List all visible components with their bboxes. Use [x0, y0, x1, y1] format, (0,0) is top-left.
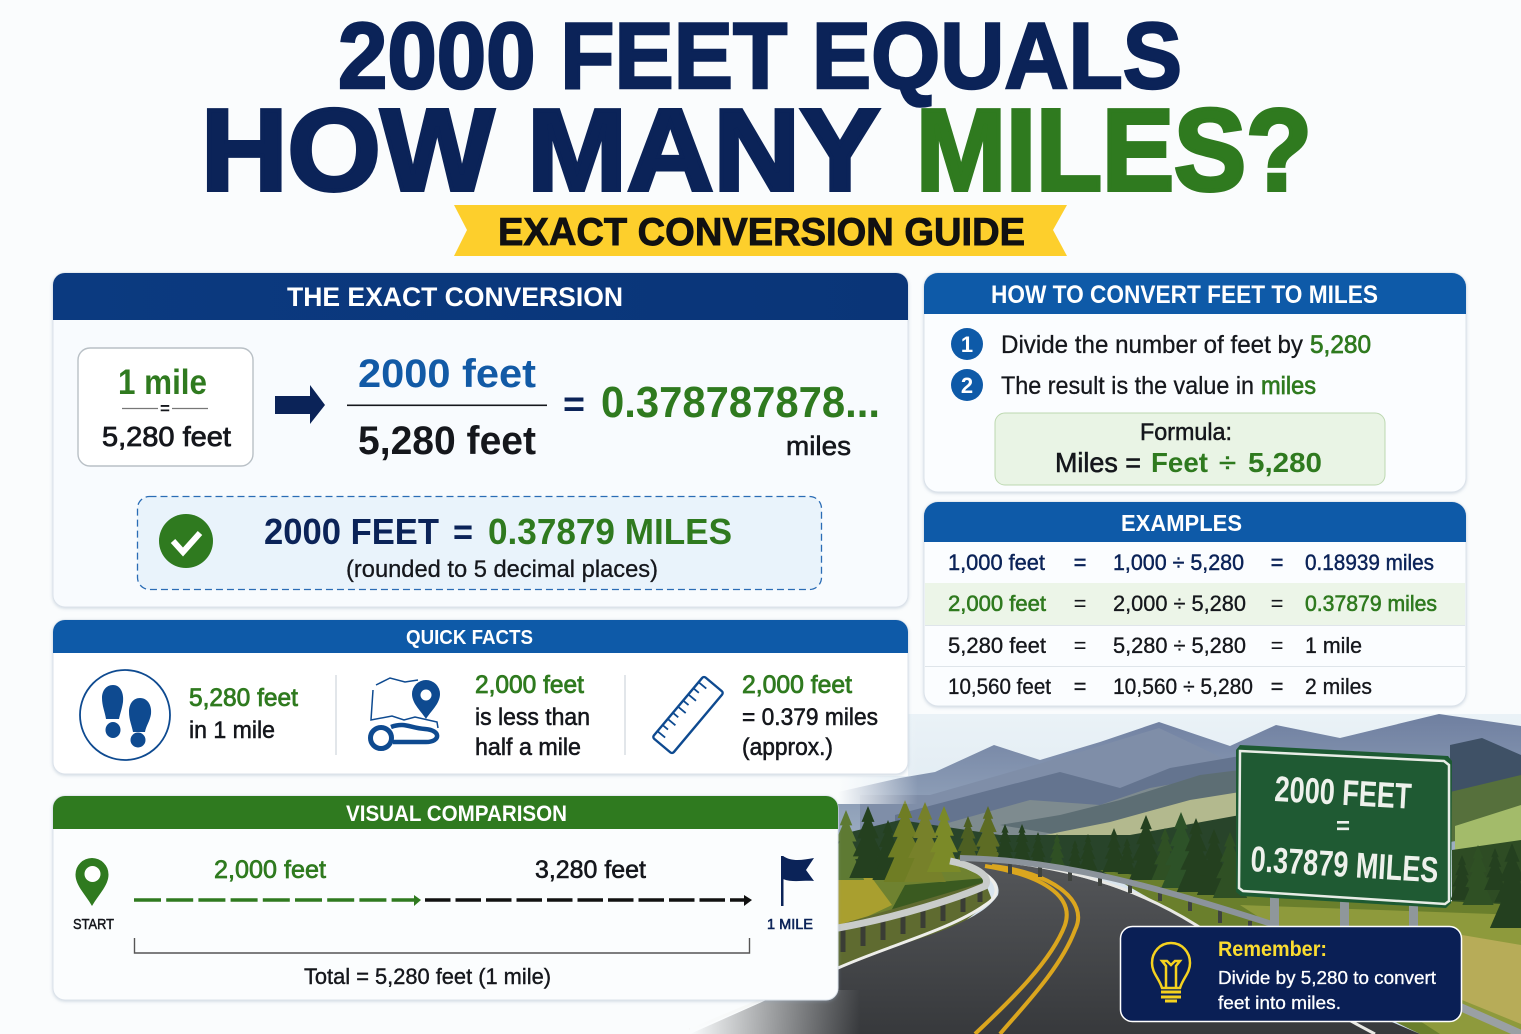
sign text: 2000 FEET	[1274, 768, 1413, 817]
icon: ruler	[652, 676, 724, 754]
panel: visual comparison	[53, 796, 838, 1000]
step 1	[951, 328, 1371, 360]
mountains right of sign	[1450, 738, 1521, 822]
header: the exact conversion	[53, 273, 908, 320]
row: 2,000 feet highlighted	[925, 583, 1465, 625]
formula box: Feet	[1151, 447, 1208, 478]
row: 1,000 feet	[948, 550, 1434, 575]
sign text: 0.37879 MILES	[1250, 838, 1440, 890]
left road edge line	[690, 868, 996, 1030]
row: 1,000 feet: 0.18939 miles	[1305, 550, 1434, 575]
panel: examples	[924, 502, 1466, 706]
box: 1 mile = 5,280 feet: 1 mile	[118, 363, 207, 402]
label: 2,000 feet: 2,000 feet	[214, 856, 326, 884]
row: 10,560 feet	[948, 674, 1372, 699]
row: 2,000 feet highlighted: =	[1271, 591, 1283, 616]
tree line mass	[838, 815, 1240, 900]
formula box: 5,280	[1248, 447, 1322, 478]
fact 1: in 1 mile	[189, 717, 275, 744]
row: 10,560 feet: =	[1271, 674, 1283, 699]
row: 1,000 feet: 1,000 ÷ 5,280	[1113, 550, 1244, 575]
fact 3: 2,000 feet	[742, 671, 852, 699]
trees	[828, 800, 1521, 928]
fact 3: (approx.)	[742, 734, 833, 761]
header: the exact conversion: THE EXACT CONVERSION	[287, 282, 623, 312]
row: 10,560 feet: =	[1074, 674, 1086, 699]
row: 2,000 feet highlighted: 2,000 feet	[948, 591, 1047, 616]
road and mountain landscape photo	[690, 714, 1521, 1034]
panel: quick facts	[53, 620, 908, 774]
row: 5,280 feet: =	[1074, 633, 1086, 658]
header: visual comparison	[53, 796, 838, 829]
fact 3	[742, 671, 878, 761]
header: examples	[924, 502, 1466, 542]
hillside grass	[1100, 870, 1521, 1034]
formula box: Miles =	[1055, 447, 1141, 478]
total bracket	[134, 938, 750, 953]
fraction	[347, 352, 547, 463]
right tree mass	[1452, 840, 1521, 930]
title line 2: MILES?	[916, 85, 1312, 215]
row: 1,000 feet: =	[1074, 550, 1086, 575]
left photo fade	[690, 990, 860, 1034]
header: visual comparison: VISUAL COMPARISON	[346, 801, 567, 826]
formula box: Formula:	[1140, 419, 1232, 446]
icon: map with pin	[370, 678, 440, 748]
arrow	[275, 385, 325, 424]
fraction: 2000 feet	[358, 352, 536, 396]
icon: check mark	[159, 514, 213, 568]
fact 1	[189, 684, 298, 744]
fact 2: half a mile	[475, 734, 581, 761]
formula box: ÷	[1219, 447, 1236, 478]
icon: footprints	[80, 670, 170, 760]
fact 1: 5,280 feet	[189, 684, 298, 712]
double yellow centre line	[975, 866, 1078, 1034]
right road edge line	[1000, 861, 1375, 1034]
row: 2,000 feet highlighted: =	[1074, 591, 1086, 616]
box: 1 mile = 5,280 feet	[78, 348, 253, 466]
row: 2,000 feet highlighted: 0.37879 miles	[1305, 591, 1437, 616]
box: 1 mile = 5,280 feet: 5,280 feet	[102, 421, 231, 452]
header: how to convert	[924, 273, 1466, 314]
title line 1: 2000 FEET EQUALS	[338, 3, 1182, 108]
roadside verge	[838, 882, 992, 972]
row: 5,280 feet: 5,280 feet	[948, 633, 1047, 658]
row: 5,280 feet	[925, 626, 1465, 666]
sign text	[1250, 768, 1440, 890]
fact 2: is less than	[475, 704, 590, 731]
finish label: 1 MILE	[767, 916, 813, 933]
far mountains	[838, 714, 1521, 850]
start label: START	[73, 916, 114, 933]
fact 2	[475, 671, 590, 761]
callout: remember: Remember:	[1218, 938, 1327, 961]
result value: 0.378787878...	[601, 378, 880, 427]
lower right guardrail	[1440, 998, 1521, 1034]
row: 10,560 feet: 10,560 feet	[948, 674, 1052, 699]
black dashed arrow	[425, 895, 752, 906]
step 1: Divide the number of feet by	[1001, 331, 1303, 359]
row: 5,280 feet: =	[1271, 633, 1283, 658]
step 2: miles	[1261, 372, 1316, 400]
row: 10,560 feet: 10,560 ÷ 5,280	[1113, 674, 1253, 699]
icon: finish flag	[781, 856, 814, 906]
row: 2,000 feet highlighted: 2,000 ÷ 5,280	[1113, 591, 1246, 616]
title line 2	[201, 85, 1312, 215]
row: 1,000 feet: =	[1271, 550, 1283, 575]
header: quick facts	[53, 620, 908, 653]
title line 2: HOW MANY	[201, 85, 880, 215]
callout: remember	[1120, 926, 1462, 1022]
right guardrail	[960, 858, 1275, 930]
rounded result box: (rounded to 5 decimal places)	[346, 556, 658, 583]
sign text: =	[1336, 813, 1350, 840]
formula box	[995, 413, 1385, 485]
rounded result box: 0.37879 MILES	[488, 511, 732, 552]
subtitle ribbon: EXACT CONVERSION GUIDE	[498, 211, 1025, 254]
label: 3,280 feet: 3,280 feet	[535, 856, 646, 884]
total label: Total = 5,280 feet (1 mile)	[304, 964, 551, 989]
step 2: 2	[961, 373, 973, 398]
icon: light bulb	[1152, 943, 1190, 1001]
rounded result box	[138, 496, 822, 590]
green dashed arrow	[134, 895, 421, 906]
row: 5,280 feet: 5,280 ÷ 5,280	[1113, 633, 1246, 658]
step 1: 1	[961, 332, 973, 357]
row: 5,280 feet: 1 mile	[1305, 633, 1362, 658]
header: examples: EXAMPLES	[1121, 510, 1242, 536]
header: how to convert: HOW TO CONVERT FEET TO MILES	[991, 281, 1378, 309]
fact 3: = 0.379 miles	[742, 704, 878, 731]
fraction: 5,280 feet	[358, 419, 536, 463]
panel: the exact conversion	[53, 273, 908, 607]
step 1: 5,280	[1310, 331, 1371, 359]
road sign	[1236, 745, 1452, 930]
left guardrail	[838, 861, 987, 952]
row: 1,000 feet: 1,000 feet	[948, 550, 1046, 575]
fact 2: 2,000 feet	[475, 671, 584, 699]
step 2	[951, 369, 1316, 401]
rounded result box: 2000 FEET	[264, 511, 439, 552]
box: 1 mile = 5,280 feet: =	[160, 399, 170, 418]
rounded result box: =	[453, 511, 473, 552]
callout: remember: feet into miles.	[1218, 992, 1341, 1013]
header: quick facts: QUICK FACTS	[406, 627, 533, 649]
icon: start pin	[76, 858, 108, 906]
panel: how to convert	[924, 273, 1466, 492]
callout: remember: Divide by 5,280 to convert	[1218, 967, 1436, 988]
step 2: The result is the value in	[1001, 372, 1254, 400]
top left photo fade	[838, 714, 918, 804]
asphalt road	[690, 858, 1420, 1034]
mountain ridges	[860, 728, 1240, 850]
row: 10,560 feet: 2 miles	[1305, 674, 1372, 699]
equals sign: =	[563, 383, 585, 424]
miles label: miles	[786, 431, 851, 461]
